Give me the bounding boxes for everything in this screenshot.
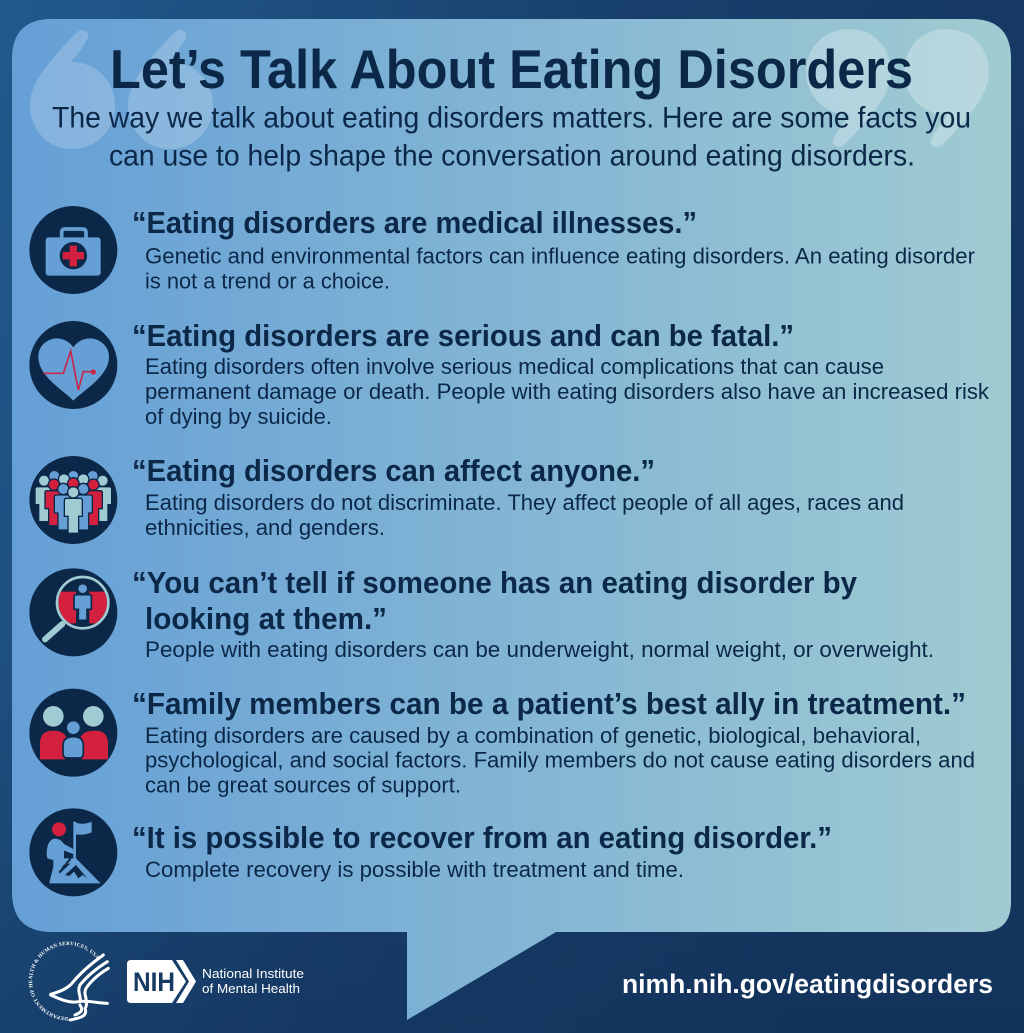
subtitle: can use to help shape the conversation around eating disorders. xyxy=(109,140,915,172)
fact 3: affect anyone xyxy=(29,453,904,544)
title: Let’s Talk About Eating Disorders xyxy=(110,38,913,100)
subtitle: The way we talk about eating disorders matters. Here are some facts you xyxy=(52,102,971,134)
fact 5 body: psychological, and social factors. Family members do not cause eating disorders and xyxy=(145,748,975,772)
icon: magnifying glass over people xyxy=(29,568,117,656)
fact 4: looking at them xyxy=(29,565,934,662)
fact 5 body: can be great sources of support. xyxy=(145,772,461,798)
fact 4 heading: looking at them.” xyxy=(145,601,387,636)
fact 6 heading: “It is possible to recover from an eating disorder.” xyxy=(132,820,832,855)
fact 2 heading: “Eating disorders are serious and can be fatal.” xyxy=(132,318,794,353)
fact 1 heading: “Eating disorders are medical illnesses.” xyxy=(132,205,697,240)
fact 5 body xyxy=(145,723,975,798)
icon: family xyxy=(29,689,117,777)
subtitle xyxy=(52,102,971,172)
organisation name: of Mental Health xyxy=(202,981,300,996)
fact 2 body: permanent damage or death. People with eating disorders also have an increased risk xyxy=(145,379,990,404)
fact 3 body: ethnicities, and genders. xyxy=(145,515,385,540)
fact 4 heading: “You can’t tell if someone has an eating disorder by xyxy=(132,565,858,600)
fact 4 body: People with eating disorders can be underweight, normal weight, or overweight. xyxy=(145,637,934,662)
fact 6: recovery xyxy=(29,808,832,896)
fact 1 body: Genetic and environmental factors can influence eating disorders. An eating disorder xyxy=(145,244,975,268)
icon: climber with flag on mountain xyxy=(29,808,117,896)
logo: NIH: NIH xyxy=(133,967,175,997)
fact 3 body: Eating disorders do not discriminate. They affect people of all ages, races and xyxy=(145,490,904,515)
organisation name: National Institute xyxy=(202,966,304,981)
icon: crowd of people xyxy=(29,456,117,544)
decorative closing quote marks xyxy=(806,29,989,147)
fact 3 heading: “Eating disorders can affect anyone.” xyxy=(132,453,655,488)
fact 2: serious and fatal xyxy=(29,318,990,429)
fact 2 body: of dying by suicide. xyxy=(145,404,332,429)
website url: nimh.nih.gov/eatingdisorders xyxy=(622,969,993,999)
icon: heart with pulse xyxy=(29,321,117,409)
logo: NIH xyxy=(127,960,196,1003)
fact 4 heading xyxy=(132,565,858,636)
fact 5 body: Eating disorders are caused by a combination of genetic, biological, behavioral, xyxy=(145,723,921,748)
fact 5 heading: “Family members can be a patient’s best ally in treatment.” xyxy=(132,686,966,721)
fact 6 body: Complete recovery is possible with treatment and time. xyxy=(145,857,684,882)
fact 1 body: is not a trend or a choice. xyxy=(145,268,390,294)
decorative opening quote marks xyxy=(30,30,213,149)
fact 5: family members xyxy=(29,686,975,798)
fact 2 body: Eating disorders often involve serious medical complications that can cause xyxy=(145,354,884,379)
icon: medical kit xyxy=(29,206,117,294)
logo: HHS seal: DEPARTMENT OF HEALTH & HUMAN SERVICES, USA xyxy=(28,942,98,1020)
fact 1 body xyxy=(145,244,975,294)
organisation name xyxy=(202,966,304,996)
fact 1: medical illnesses xyxy=(29,205,975,294)
fact 3 body xyxy=(145,490,904,540)
fact 2 body xyxy=(145,354,990,429)
